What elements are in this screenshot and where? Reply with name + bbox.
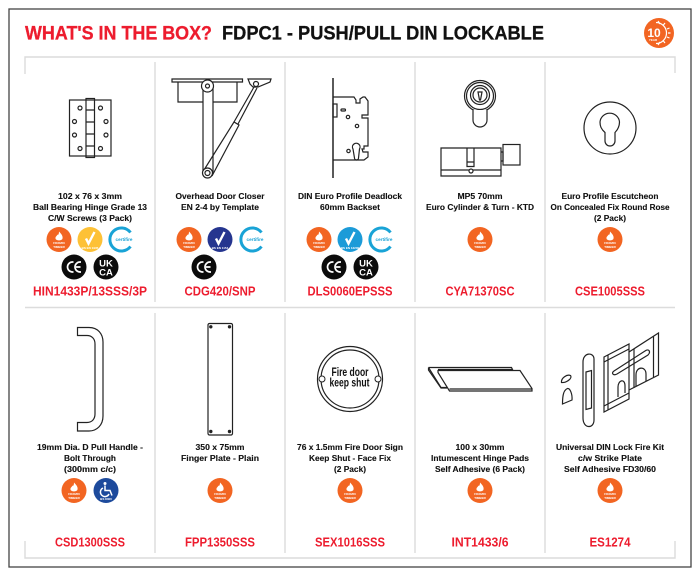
icon: intumescent hinge pads <box>428 368 532 391</box>
icon: fire rated badge: FD30/60 <box>474 241 486 245</box>
description <box>426 191 534 212</box>
icon: fire door keep shut sign: Fire door <box>332 365 369 379</box>
icon: fire door keep shut sign: keep shut <box>330 376 370 390</box>
icon: finger plate <box>208 324 232 435</box>
icon: fire rated badge: TIMBER <box>53 245 66 249</box>
product code: DLS0060EPSSS <box>308 284 392 298</box>
product code: CDG420/SNP <box>184 284 256 298</box>
icon: round escutcheon <box>584 102 636 154</box>
panel: door closer <box>172 79 271 298</box>
description: c/w Strike Plate <box>578 453 642 463</box>
product code: CSE1005SSS <box>575 284 645 298</box>
icon: 10 year guarantee badge: YEAR <box>649 38 658 42</box>
description: Self Adhesive FD30/60 <box>564 464 656 474</box>
icon: fire rated badge <box>208 478 232 503</box>
icon: 10 year guarantee badge: 10 <box>647 26 661 40</box>
icon: CE mark <box>192 254 216 280</box>
icon: sky blue tick badge <box>338 227 362 252</box>
icon: certifire badge <box>110 228 133 251</box>
icon: fire rated badge <box>468 478 492 503</box>
title: FDPC1 - PUSH/PULL DIN LOCKABLE <box>222 22 544 44</box>
icon: fire rated badge: TIMBER <box>604 496 617 500</box>
icon: 10 year guarantee badge <box>644 18 674 48</box>
icon: fire rated badge: TIMBER <box>313 245 326 249</box>
description: Universal DIN Lock Fire Kit <box>556 442 664 452</box>
icon: certifire badge: certifire <box>376 237 393 242</box>
icon: fire rated badge: FD30/60 <box>183 241 195 245</box>
description: Overhead Door Closer <box>176 191 265 201</box>
description <box>298 191 402 212</box>
icon: overhead door closer <box>172 79 271 178</box>
icon: fire rated badge: TIMBER <box>474 496 487 500</box>
icon: fire rated badge: TIMBER <box>604 245 617 249</box>
icon: UKCA mark: UK <box>99 258 113 270</box>
icon: certifire badge: certifire <box>246 237 264 242</box>
description: DIN Euro Profile Deadlock <box>298 191 402 201</box>
product code: ES1274 <box>590 536 630 550</box>
description: Euro Cylinder & Turn - KTD <box>426 202 534 212</box>
icon: fire rated badge: FD30/60 <box>53 241 65 245</box>
description: On Concealed Fix Round Rose <box>550 202 670 212</box>
description <box>176 191 265 212</box>
icon: fire rated badge: TIMBER <box>68 496 81 500</box>
description: 100 x 30mm <box>456 442 505 452</box>
description: Euro Profile Escutcheon <box>562 191 658 201</box>
panel: escutcheon <box>550 102 670 298</box>
icon: fire rated badge: TIMBER <box>214 496 227 500</box>
icon: DIN euro deadlock <box>333 78 368 178</box>
icon: fire rated badge <box>598 478 622 503</box>
icon: fire rated badge <box>46 227 72 252</box>
icon: navy tick badge <box>208 227 232 252</box>
icon: certifire badge <box>241 228 264 251</box>
icon: fire rated badge: FD30/60 <box>313 241 325 245</box>
icon: universal DIN lock fire kit <box>561 333 658 427</box>
icon: fire rated badge: TIMBER <box>344 496 357 500</box>
icon: accessibility badge: BS 8300 <box>100 497 112 501</box>
icon: fire rated badge: FD30/60 <box>604 241 616 245</box>
icon: fire door keep shut sign <box>318 346 382 412</box>
panel: hinge <box>33 98 147 298</box>
icon: CE mark <box>322 254 346 280</box>
icon: euro cylinder and turn <box>441 80 520 176</box>
icon: UKCA mark: CA <box>99 268 113 278</box>
icon: fire rated badge <box>176 227 202 252</box>
panel: fire kit <box>556 333 664 550</box>
description: Ball Bearing Hinge Grade 13 <box>33 202 147 212</box>
icon: fire rated badge: TIMBER <box>183 245 196 249</box>
description: 76 x 1.5mm Fire Door Sign <box>297 442 403 452</box>
icon: fire rated badge <box>62 478 86 503</box>
panel: finger plate <box>181 324 259 550</box>
description <box>33 191 147 223</box>
icon: yellow tick badge: BS EN 1935 <box>82 246 99 250</box>
title <box>25 22 544 44</box>
icon: ball bearing hinge <box>70 98 111 158</box>
description: EN 2-4 by Template <box>181 202 259 212</box>
icon: D pull handle <box>78 328 103 431</box>
icon: fire rated badge: FD30/60 <box>214 492 226 496</box>
icon: fire rated badge <box>598 227 622 252</box>
panel: pull handle <box>37 328 143 550</box>
icon: yellow tick badge <box>78 227 102 252</box>
product code: HIN1433P/13SSS/3P <box>33 284 147 298</box>
description: Bolt Through <box>64 453 116 463</box>
description: (2 Pack) <box>334 464 366 474</box>
icon: sky blue tick badge: BS EN 12209 <box>341 246 359 250</box>
icon: fire rated badge: FD30/60 <box>474 492 486 496</box>
product code: FPP1350SSS <box>185 536 255 550</box>
description: Keep Shut - Face Fix <box>309 453 391 463</box>
icon: accessibility badge <box>94 478 118 503</box>
product code: CSD1300SSS <box>55 536 125 550</box>
description: MP5 70mm <box>458 191 503 201</box>
title: WHAT'S IN THE BOX? <box>25 22 212 44</box>
description: Finger Plate - Plain <box>181 453 259 463</box>
icon: fire rated badge: TIMBER <box>474 245 487 249</box>
icon: fire rated badge: FD30/60 <box>68 492 80 496</box>
product code: CYA71370SC <box>446 284 514 298</box>
description <box>431 442 529 474</box>
description <box>297 442 403 474</box>
panel: hinge pads <box>428 368 532 550</box>
description <box>37 442 143 474</box>
product code: SEX1016SSS <box>315 536 385 550</box>
panel: fire door sign <box>297 346 403 550</box>
icon: UKCA mark: UK <box>359 258 373 270</box>
icon: certifire badge <box>370 228 393 251</box>
icon: fire rated badge: FD30/60 <box>604 492 616 496</box>
description <box>556 442 664 474</box>
description: (300mm c/c) <box>64 464 116 474</box>
description: 350 x 75mm <box>196 442 245 452</box>
description: 102 x 76 x 3mm <box>58 191 122 201</box>
product code: INT1433/6 <box>452 536 508 550</box>
description: C/W Screws (3 Pack) <box>48 213 132 223</box>
panel: cylinder <box>426 80 534 298</box>
description: Intumescent Hinge Pads <box>431 453 529 463</box>
icon: certifire badge: certifire <box>116 237 133 242</box>
description: (2 Pack) <box>594 213 626 223</box>
description <box>181 442 259 463</box>
description <box>550 191 670 223</box>
icon: fire rated badge: FD30/60 <box>344 492 356 496</box>
panel: deadlock <box>298 78 402 298</box>
icon: UKCA mark <box>354 254 378 280</box>
description: Self Adhesive (6 Pack) <box>435 464 525 474</box>
icon: CE mark <box>62 254 86 280</box>
icon: fire rated badge <box>306 227 332 252</box>
icon: navy tick badge: BS EN 1154 <box>212 246 229 250</box>
icon: fire rated badge <box>338 478 362 503</box>
icon: UKCA mark <box>94 254 118 280</box>
icon: UKCA mark: CA <box>359 268 373 278</box>
icon: fire rated badge <box>468 227 492 252</box>
description: 19mm Dia. D Pull Handle - <box>37 442 143 452</box>
description: 60mm Backset <box>320 202 380 212</box>
